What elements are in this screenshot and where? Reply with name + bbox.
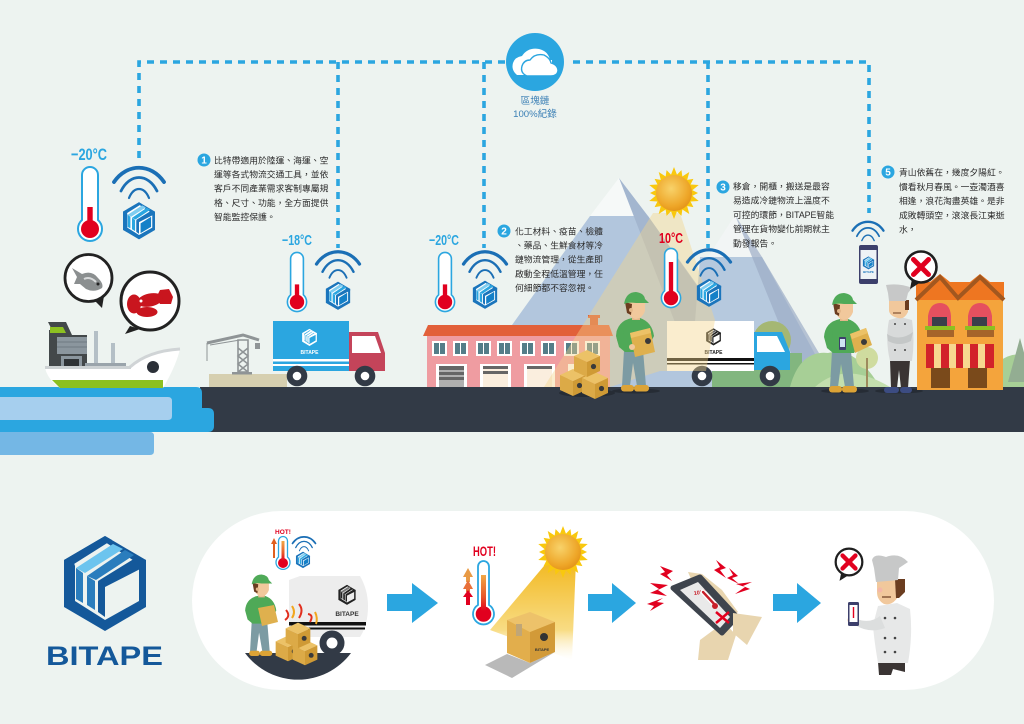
step 2 text: 啟動全程低溫管理，任 [515, 268, 603, 279]
step 3 text: 可控的環節，BITAPE智能 [733, 209, 834, 220]
bubble: rejected [906, 252, 936, 289]
sensor group: ship: −20°C [71, 145, 107, 164]
step 2 text [498, 224, 603, 293]
arrow 3 [773, 583, 821, 623]
sensor group: warehouse [429, 233, 506, 312]
person with phone and box [821, 293, 872, 394]
scene 1: truck with heat: BITAPE [335, 611, 359, 618]
sensor group: hot: 10°C [659, 231, 683, 247]
truck: blue BITAPE: BITAPE [301, 350, 319, 356]
truck: blue BITAPE [273, 321, 385, 383]
step 3 text: 移倉，開櫃，搬送是最容 [733, 180, 830, 192]
sensor group: hot [659, 231, 730, 308]
sensor group: truck: −18°C [282, 233, 312, 249]
scene 3: phone alert [647, 560, 762, 660]
step 5 text [882, 166, 1005, 234]
step 5 text: 成敗轉頭空，滾滾長江東逝 [899, 210, 1005, 220]
arrow 2 [588, 583, 636, 623]
chef [875, 284, 923, 394]
step 3 text: 易造成冷鏈物流上溫度不 [733, 194, 830, 206]
person carrying box [612, 292, 660, 394]
step 5 text: 慣看秋月春風。一壺濁酒喜 [899, 181, 1005, 192]
stacked boxes [559, 350, 615, 399]
panel: failure sequence [192, 511, 994, 690]
step 1 text [198, 154, 329, 222]
step 5 text: 相逢，浪花淘盡英雄。是非 [899, 195, 1005, 206]
scene 1: truck with heat: HOT! [275, 529, 291, 536]
step 1 text: 客戶不同產業需求客制專屬規 [214, 182, 329, 194]
bubble: fish [65, 254, 112, 308]
step 3 text: 3 [720, 182, 726, 194]
restaurant [916, 274, 1004, 390]
arrow 1 [387, 583, 438, 623]
hills and trees [712, 321, 1024, 387]
step 5 text: 5 [885, 168, 891, 178]
scene 1: truck with heat [245, 529, 368, 680]
step 2 text: 2 [501, 226, 507, 238]
scene 3: phone alert: 10°C [693, 589, 706, 597]
step 3 text [716, 180, 834, 248]
sun beam [544, 213, 715, 387]
step 2 text: 、藥品、生鮮食材等冷 [515, 240, 603, 250]
step 2 text: 鏈物流管理，從生產即 [515, 254, 603, 264]
warehouse [423, 315, 613, 387]
scene 2: box in sun: HOT! [473, 543, 496, 559]
step 1 text: 比特帶適用於陸運、海運、空 [214, 154, 329, 166]
ship [45, 322, 180, 388]
bubble: lobster [121, 272, 179, 334]
icon: cloud blockchain [506, 33, 564, 91]
sensor group: warehouse: −20°C [429, 233, 459, 249]
crane [207, 335, 287, 387]
dashed network lines [139, 62, 869, 248]
mountains [512, 178, 833, 387]
road [200, 387, 1024, 432]
step 1 text: 智能監控保護。 [214, 211, 276, 222]
panel: BITAPE logo: BITAPE [46, 641, 163, 671]
truck: white BITAPE [667, 321, 790, 383]
panel: BITAPE logo [46, 536, 163, 671]
phone with wifi: BITAPE [863, 270, 874, 274]
step 1 text: 運等各式物流交通工具，並依 [214, 168, 329, 180]
step 3 text: 動發報告。 [733, 238, 777, 248]
phone with wifi [852, 222, 884, 284]
scene 4: chef rejecting [836, 549, 911, 675]
scene 2: box in sun: BITAPE [535, 647, 550, 652]
sensor group: truck [282, 233, 360, 312]
label: blockchain record: 區塊鏈 [521, 95, 550, 107]
step 2 text: 何細節都不容忽視。 [515, 282, 594, 293]
step 1 text: 1 [201, 156, 207, 166]
label: 100 percent record: 100%紀錄 [513, 108, 557, 120]
step 1 text: 格、尺寸、功能，全方面提供 [214, 197, 329, 208]
water [0, 387, 214, 455]
step 2 text: 化工材料、疫苗、檢體 [515, 226, 603, 236]
step 5 text: 青山依舊在，幾度夕陽紅。 [899, 166, 1005, 178]
step 5 text: 水， [899, 224, 917, 234]
sun [648, 167, 700, 219]
step 3 text: 管理在貨物變化前期就主 [733, 223, 830, 234]
sensor group: ship [71, 145, 164, 241]
truck: white BITAPE: BITAPE [705, 350, 723, 356]
scene 2: box in sun [463, 526, 589, 678]
